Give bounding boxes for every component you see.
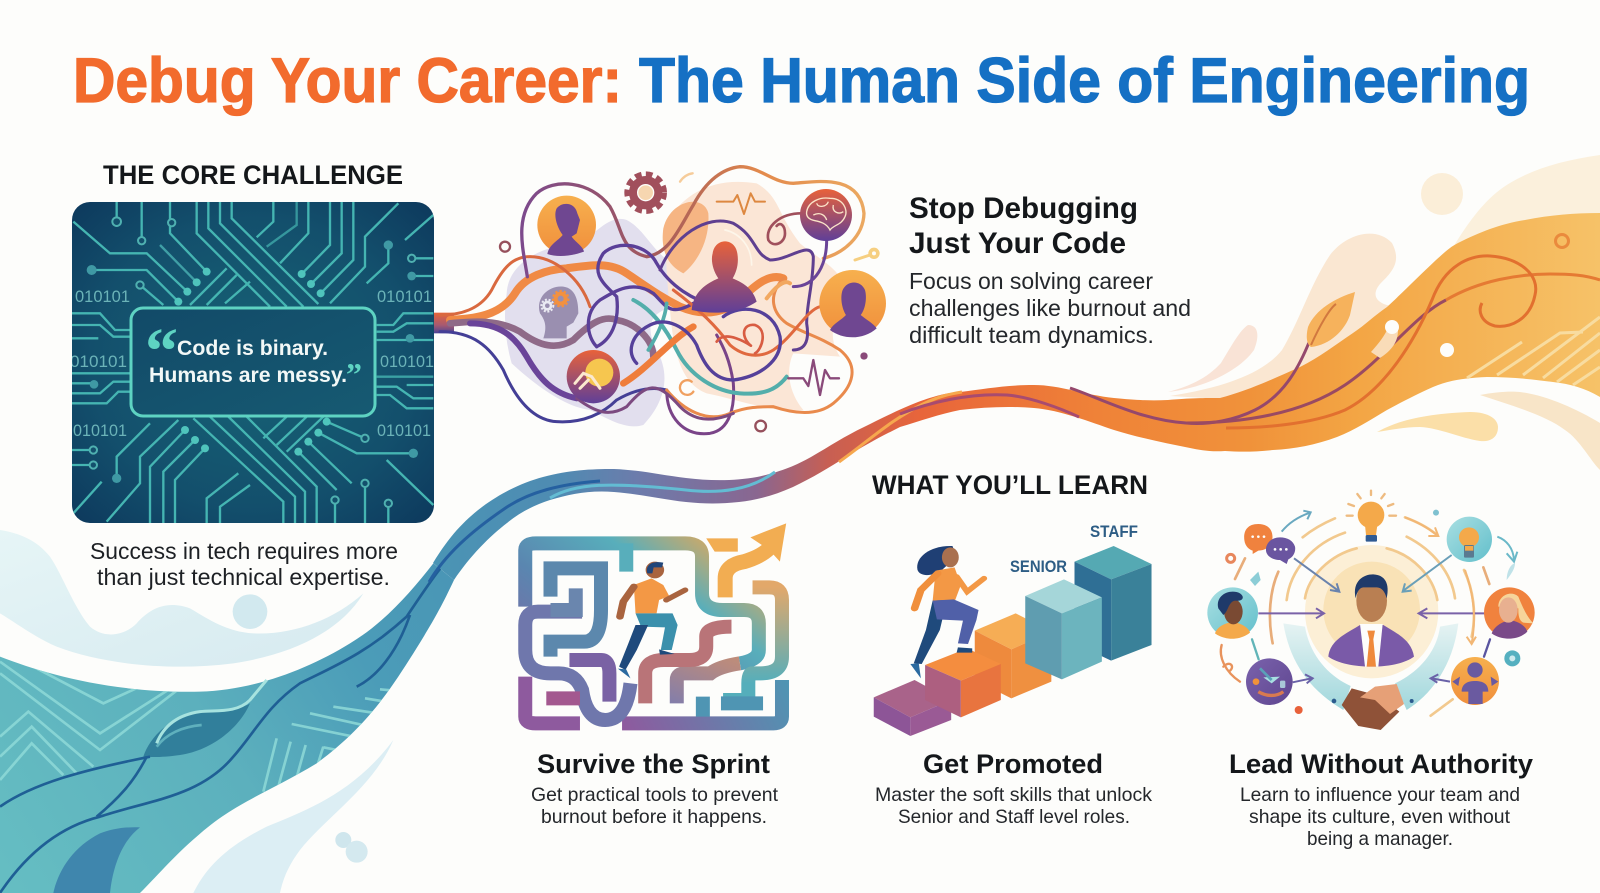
core challenge caption: Success in tech requires more — [90, 538, 398, 564]
leaf and droplets on orange wave — [1307, 292, 1600, 470]
icon: maze with runner and arrow — [525, 523, 786, 723]
panel: circuit board quote card — [70, 202, 434, 523]
text block: stop debugging: Focus on solving career — [909, 268, 1153, 294]
bulb circle — [1447, 517, 1492, 562]
staircase labels: STAFF — [1090, 523, 1138, 541]
learning item: lead without authority — [1229, 749, 1533, 850]
panel: circuit board quote card: Code is binary. — [177, 337, 328, 360]
core challenge caption: than just technical expertise. — [97, 564, 390, 590]
title: The Human Side of Engineering — [639, 46, 1530, 116]
learning item: lead without authority: Lead Without Authority — [1229, 749, 1533, 779]
person circle left — [1207, 587, 1258, 639]
learning item: survive the sprint: burnout before it happens. — [541, 806, 767, 828]
learning item: lead without authority: Learn to influence your team and — [1240, 784, 1520, 806]
arrows to leader — [1258, 511, 1517, 683]
small accents — [1227, 554, 1235, 562]
brain circle — [800, 189, 852, 241]
circle bottom left: tools — [1246, 658, 1293, 705]
icon: career staircase blocks — [874, 546, 1152, 736]
staircase labels: SENIOR — [1010, 558, 1067, 576]
speech bubbles — [1244, 524, 1295, 564]
panel: circuit board quote card: ” — [346, 356, 362, 392]
text block: stop debugging — [909, 192, 1191, 348]
title — [73, 46, 1530, 116]
panel: circuit board quote card: 010101 — [75, 288, 130, 306]
central leader — [1328, 574, 1414, 667]
panel: circuit board quote card: 010101 — [73, 422, 127, 440]
bulb top — [1347, 491, 1396, 542]
heading: what you'll learn: WHAT YOU’LL LEARN — [872, 470, 1148, 500]
person circle right — [819, 270, 886, 337]
panel: circuit board quote card: 010101 — [377, 288, 432, 306]
title: Debug Your Career: — [73, 46, 622, 116]
panel: circuit board quote card: “ — [145, 315, 178, 388]
climbing woman — [910, 546, 984, 678]
icon: team influence network with handshake — [1207, 491, 1535, 730]
runner in maze — [618, 562, 685, 678]
learning item: survive the sprint: Get practical tools to prevent — [531, 784, 779, 806]
panel: circuit board quote card: Humans are messy. — [149, 364, 347, 387]
illustration: tangled career threads — [434, 167, 886, 434]
panel: circuit board quote card: 010101 — [380, 353, 434, 371]
core challenge caption — [90, 538, 398, 590]
main ribbon connecting challenge to learning — [433, 213, 1600, 580]
text block: stop debugging: difficult team dynamics. — [909, 322, 1154, 348]
handshake — [1332, 684, 1414, 730]
person circle right — [1484, 587, 1535, 639]
person circle top left — [537, 196, 596, 256]
ribbon details and curling lines — [429, 234, 1600, 582]
learning item: get promoted: Senior and Staff level roles. — [898, 806, 1130, 828]
staircase labels — [1010, 523, 1138, 576]
flowing teal wave: bottom left — [0, 530, 473, 893]
text block: stop debugging: Stop Debugging — [909, 192, 1138, 225]
circle bottom right: team member — [1451, 657, 1499, 705]
gear icon — [627, 174, 664, 211]
text block: stop debugging: challenges like burnout and — [909, 295, 1191, 321]
heading: the core challenge: THE CORE CHALLENGE — [103, 160, 403, 190]
flowing orange wave: pale shapes behind — [1168, 155, 1600, 400]
head with gears — [539, 287, 578, 338]
learning item: get promoted — [875, 749, 1152, 828]
learning item: lead without authority: shape its culture, even without — [1249, 806, 1511, 828]
learning item: get promoted: Get Promoted — [923, 749, 1103, 779]
runner circle — [567, 350, 620, 403]
text block: stop debugging: Just Your Code — [909, 227, 1126, 260]
learning item: get promoted: Master the soft skills that unlock — [875, 784, 1152, 806]
learning item: lead without authority: being a manager. — [1307, 828, 1453, 850]
learning item: survive the sprint — [531, 749, 779, 828]
panel: circuit board quote card: 010101 — [377, 422, 431, 440]
center person — [692, 241, 757, 313]
mess wire stem — [434, 313, 454, 333]
panel: circuit board quote card: 010101 — [70, 353, 127, 371]
learning item: survive the sprint: Survive the Sprint — [537, 749, 770, 779]
